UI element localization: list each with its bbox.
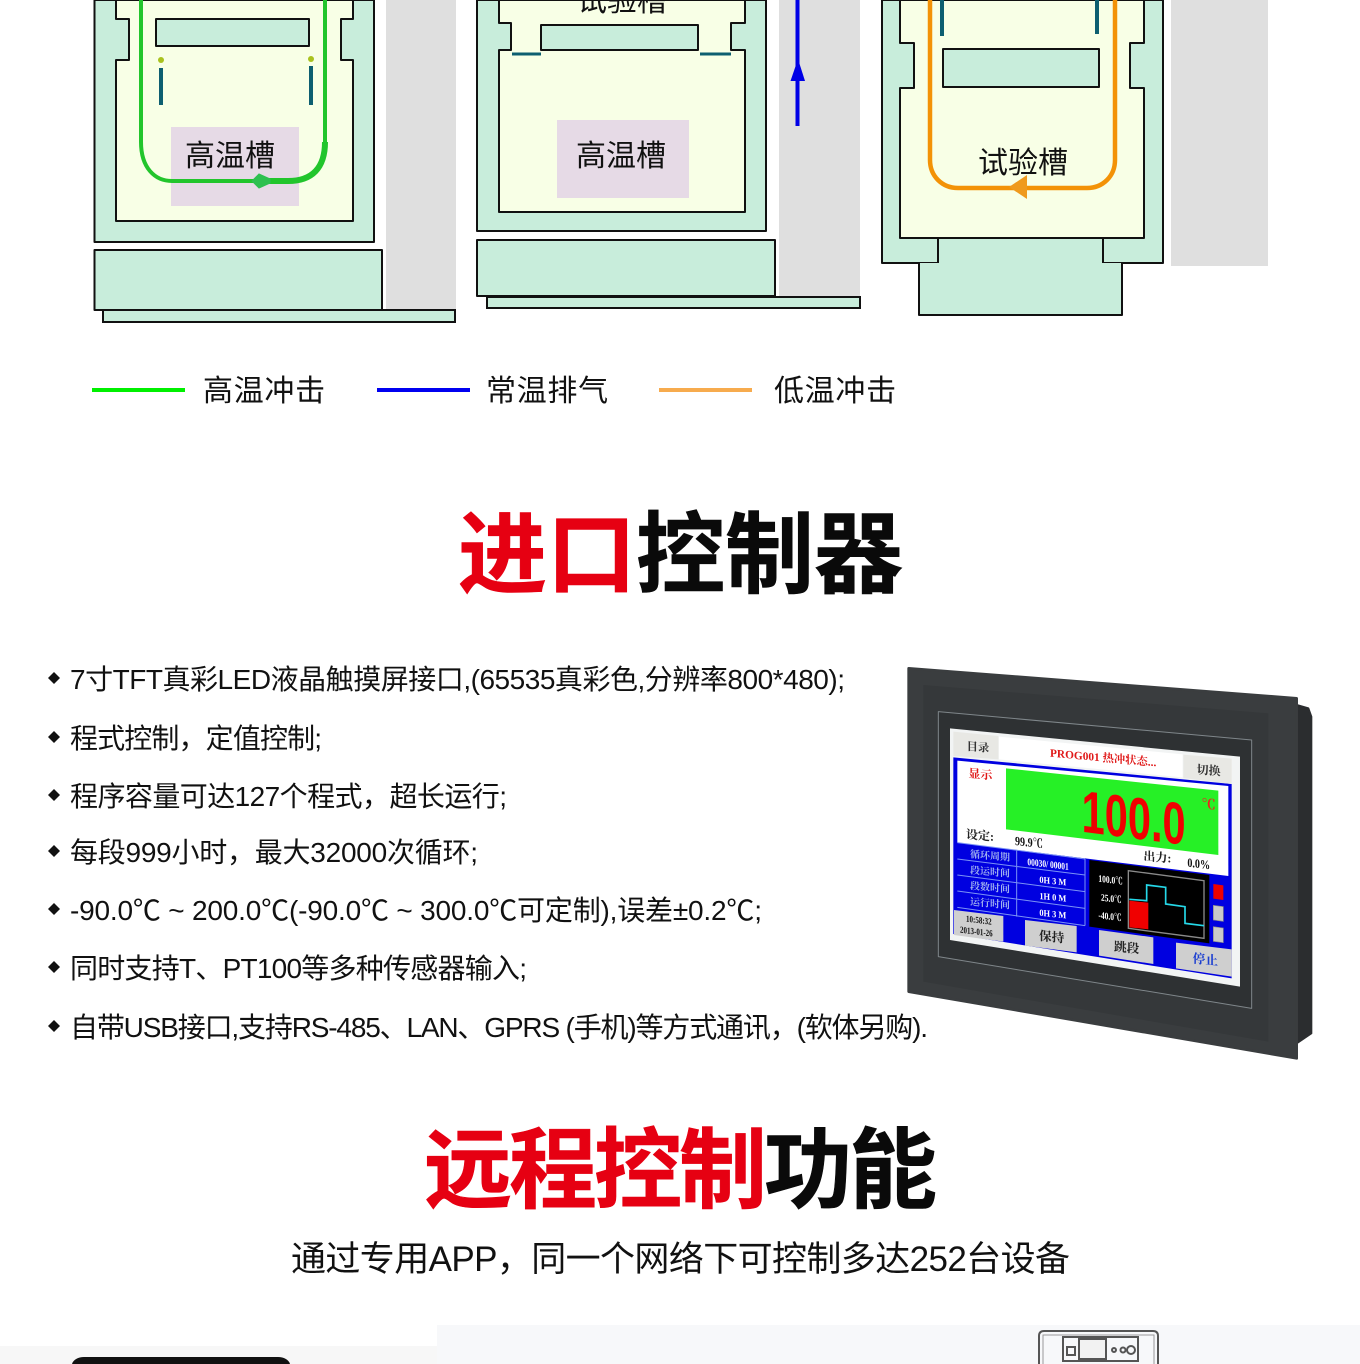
bullet 2 [48, 731, 60, 743]
chamber shell [882, 0, 1163, 263]
hold button [1025, 920, 1077, 952]
left damper [512, 52, 541, 56]
row label 3: 段数时间 [970, 879, 1010, 896]
title text: PROG001 热冲状态... [1050, 746, 1156, 769]
clock date: 2013-01-26 [960, 925, 993, 939]
temperature unit: ℃ [1202, 797, 1216, 814]
skip button face [1099, 930, 1153, 964]
menu text: 目录 [967, 739, 990, 755]
device bezel [909, 668, 1297, 1058]
clock time: 10:58:32 [966, 914, 992, 927]
heading: imported controller: 进口控制器 [458, 483, 903, 612]
status table [957, 843, 1085, 926]
panel: low temperature shock diagram [882, 0, 1268, 315]
row value 3: 1H 0 M [1039, 891, 1067, 904]
title bar [999, 737, 1183, 777]
device small square [1067, 1347, 1075, 1355]
device rear housing [1297, 705, 1311, 1043]
row value 2: 0H 3 M [1039, 874, 1067, 888]
stop button face [1176, 943, 1232, 977]
output value: 0.0% [1187, 857, 1210, 873]
clock button [954, 910, 1003, 942]
feature 6: 同时支持T、PT100等多种传感器输入; [70, 953, 527, 984]
phone top edge [72, 1357, 290, 1364]
axis label high: 100.0℃ [1098, 873, 1123, 887]
legend [92, 366, 897, 410]
inner frame [938, 712, 1252, 1008]
device inner casing [1043, 1335, 1154, 1364]
gray status lamp lower [1213, 927, 1223, 943]
bullet 3 [48, 789, 60, 801]
right sensor tip [308, 56, 314, 62]
legend text: low temperature shock: 低温冲击 [774, 366, 897, 410]
right sensor [1095, 0, 1099, 34]
chamber shell [477, 0, 766, 231]
green flow arrow [252, 174, 270, 188]
device icon [1039, 1331, 1158, 1364]
orange airflow path [930, 0, 1115, 188]
gray status lamp upper [1213, 905, 1223, 921]
label: high temperature tank: 高温槽 [576, 131, 666, 175]
bottom right panel background [437, 1325, 1360, 1364]
feature 3: 程序容量可达127个程式，超长运行; [70, 781, 507, 812]
interface header [953, 732, 1232, 784]
display label: 显示 [968, 765, 993, 783]
green temperature display [1006, 768, 1218, 855]
chamber interior [116, 0, 353, 221]
bezel inner recess [923, 685, 1268, 1042]
high temperature tank label background [557, 120, 689, 198]
temperature reading: 100.0 [1082, 779, 1186, 858]
feature 1: 7寸TFT真彩LED液晶触摸屏接口,(65535真彩色,分辨率800*480); [70, 664, 845, 695]
base neck [938, 238, 1103, 264]
axis label low: -40.0℃ [1098, 909, 1122, 923]
divider bar [156, 19, 309, 46]
orange flow arrow [1009, 175, 1027, 199]
blue interface frame [953, 757, 1232, 978]
left sensor [940, 0, 944, 36]
chamber interior [900, 0, 1144, 238]
hold text: 保持 [1039, 928, 1065, 946]
menu button [953, 732, 998, 759]
blue airflow line [796, 0, 800, 126]
base block [919, 263, 1122, 315]
setpoint value: 99.9℃ [1015, 835, 1043, 851]
base strip [487, 297, 860, 308]
divider bar [541, 25, 698, 50]
subtitle: 通过专用APP，同一个网络下可控制多达252台设备 [291, 1240, 1070, 1279]
feature 2: 程式控制，定值控制; [70, 723, 322, 754]
label: high temperature tank: 高温槽 [185, 131, 275, 175]
feature 5: -90.0℃ ~ 200.0℃(-90.0℃ ~ 300.0℃可定制),误差±0.2℃; [70, 895, 762, 926]
stop button [1176, 943, 1232, 977]
base strip [103, 310, 455, 322]
bullet 1 [48, 672, 60, 684]
gray side duct [386, 0, 456, 310]
switch text: 切换 [1197, 761, 1221, 778]
device knob large [1127, 1346, 1135, 1354]
legend line: high temperature shock [92, 388, 185, 392]
device outer casing [1039, 1331, 1158, 1364]
red status lamp [1213, 884, 1223, 900]
green thick return segment [262, 142, 325, 181]
bottom left panel background [0, 1346, 437, 1364]
device display [1079, 1339, 1106, 1359]
left sensor tip [158, 57, 164, 63]
hold button face [1025, 920, 1077, 952]
switch button [1183, 755, 1232, 784]
right sensor [309, 66, 313, 105]
chart background [1089, 860, 1209, 943]
clock button face [954, 910, 1003, 942]
screen [950, 728, 1240, 987]
skip button [1099, 930, 1153, 964]
base block [477, 240, 775, 296]
table grid [957, 843, 1085, 926]
green airflow path [141, 0, 325, 181]
row value 1: 00030/ 00001 [1027, 856, 1069, 872]
bullet 5 [48, 903, 60, 915]
axis label mid: 25.0℃ [1101, 892, 1122, 905]
chart plot frame [1128, 871, 1204, 938]
row label 4: 运行时间 [970, 895, 1010, 912]
divider bar [943, 49, 1099, 87]
gray side duct [779, 0, 860, 296]
device knob small one [1112, 1348, 1116, 1352]
device control panel [1063, 1337, 1138, 1361]
stop text: 停止 [1193, 951, 1218, 968]
bullet 6 [48, 961, 60, 973]
chamber shell [94, 0, 374, 242]
setpoint label: 设定: [966, 827, 994, 844]
output label: 出力: [1143, 848, 1171, 866]
legend text: high temperature shock: 高温冲击 [203, 366, 326, 410]
controller touch screen device [909, 668, 1311, 1058]
skip text: 跳段 [1114, 939, 1140, 956]
device knob small two [1120, 1348, 1126, 1352]
high temperature tank label background [171, 127, 299, 206]
bullet 4 [48, 845, 60, 857]
feature 7: 自带USB接口,支持RS-485、LAN、GPRS (手机)等方式通讯，(软体另购). [70, 1012, 928, 1043]
blue flow arrow [790, 59, 805, 81]
feature 4: 每段999小时，最大32000次循环; [70, 837, 478, 868]
label: test tank: 试验槽 [978, 138, 1068, 182]
row label 2: 段运时间 [970, 863, 1010, 880]
left sensor [159, 68, 163, 105]
row label 1: 循环周期 [970, 847, 1010, 864]
right damper [700, 52, 731, 56]
legend text: ambient exhaust: 常温排气 [486, 366, 609, 410]
gray side duct [1171, 0, 1268, 266]
red filled progress [1129, 901, 1148, 929]
base block [94, 250, 382, 310]
row value 4: 0H 3 M [1039, 907, 1067, 921]
cyan program curve [1129, 885, 1204, 926]
controller feature list [48, 664, 928, 1043]
chamber interior [499, 0, 745, 212]
heading: remote control function: 远程控制功能 [424, 1100, 935, 1227]
trend chart [1089, 860, 1209, 943]
bullet 7 [48, 1020, 60, 1032]
panel: high temperature shock diagram [94, 0, 456, 322]
display area [957, 761, 1228, 876]
legend line: ambient exhaust [377, 388, 470, 392]
panel: ambient exhaust diagram [477, 0, 860, 308]
legend line: low temperature shock [659, 388, 752, 392]
